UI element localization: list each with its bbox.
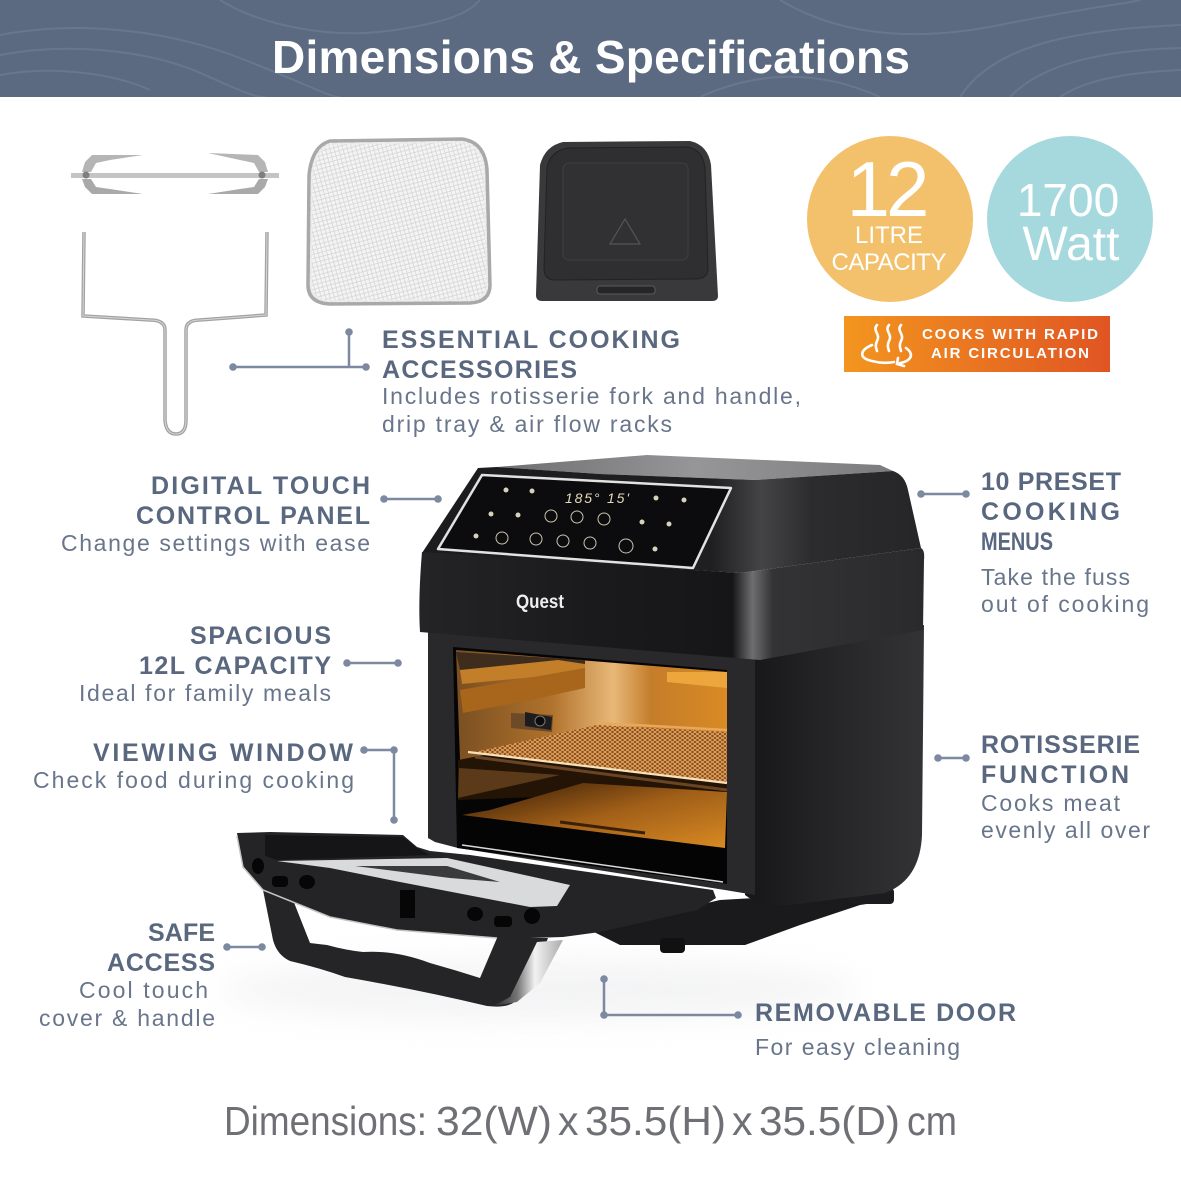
text: safe access: cover & handle bbox=[39, 1005, 215, 1031]
dimensions text: Dimensions: bbox=[224, 1098, 427, 1144]
dimensions text: 32(W) bbox=[436, 1098, 552, 1144]
badge: 1700 watt bbox=[987, 136, 1153, 302]
shadow under air fryer bbox=[220, 960, 860, 1020]
base and feet bbox=[590, 888, 894, 953]
text: digital touch control panel: DIGITAL TOUCH bbox=[151, 472, 370, 500]
text: preset cooking menus: out of cooking bbox=[981, 591, 1149, 617]
icon: drip tray bbox=[536, 141, 718, 301]
connector: viewing window bbox=[360, 746, 398, 824]
badge: 12 litre capacity: 12 bbox=[847, 145, 926, 233]
icon: rapid air bbox=[862, 325, 911, 366]
text: preset cooking menus: Take the fuss bbox=[981, 564, 1130, 590]
text: digital touch control panel: CONTROL PANEL bbox=[136, 502, 370, 530]
text: essential cooking accessories bbox=[382, 326, 801, 437]
text: preset cooking menus: 10 PRESET bbox=[981, 468, 1121, 496]
text: safe access: SAFE bbox=[148, 919, 215, 947]
text: viewing window: Check food during cooking bbox=[33, 767, 354, 793]
door handle bbox=[263, 890, 548, 1007]
connector: rotisserie bbox=[934, 754, 970, 762]
banner: rapid air circulation: AIR CIRCULATION bbox=[931, 345, 1089, 362]
text: removable door: REMOVABLE DOOR bbox=[755, 999, 1016, 1027]
door body bbox=[237, 832, 716, 938]
side body bbox=[745, 625, 924, 905]
connector: safe access bbox=[223, 943, 266, 951]
text: viewing window: VIEWING WINDOW bbox=[93, 739, 353, 767]
brand logo: Quest bbox=[516, 592, 565, 613]
control panel: 185° 15' bbox=[565, 490, 630, 506]
text: essential cooking accessories: ESSENTIAL COOKING bbox=[382, 326, 680, 354]
text: safe access: Cool touch bbox=[79, 977, 208, 1003]
text: spacious capacity: Ideal for family meals bbox=[79, 680, 331, 706]
text: spacious capacity: SPACIOUS bbox=[190, 622, 331, 650]
badge: 12 litre capacity bbox=[807, 136, 973, 302]
text: removable door bbox=[755, 999, 1016, 1060]
text: digital touch control panel bbox=[61, 472, 370, 556]
open door with handle bbox=[237, 832, 716, 1007]
title: Dimensions & Specifications bbox=[272, 31, 910, 83]
door glass bbox=[277, 858, 570, 907]
text: preset cooking menus: COOKING bbox=[981, 498, 1120, 526]
text: preset cooking menus bbox=[981, 468, 1149, 617]
door inner dark slab bbox=[265, 835, 430, 860]
dimensions text: 35.5(H) bbox=[585, 1098, 726, 1144]
handle chrome bbox=[493, 940, 563, 1006]
text: essential cooking accessories: drip tray & air flow racks bbox=[382, 411, 672, 437]
icon: air flow rack bbox=[308, 139, 490, 304]
text: essential cooking accessories: ACCESSORIES bbox=[382, 356, 577, 384]
connector: preset menus bbox=[917, 490, 970, 498]
header banner bbox=[0, 0, 1181, 97]
dimensions text: 35.5(D) bbox=[759, 1098, 900, 1144]
text: safe access: ACCESS bbox=[107, 949, 215, 977]
banner: rapid air circulation: COOKS WITH RAPID bbox=[922, 326, 1098, 343]
text: rotisserie function: ROTISSERIE bbox=[981, 731, 1140, 759]
text: spacious capacity: 12L CAPACITY bbox=[139, 652, 331, 680]
oven interior bbox=[453, 647, 727, 884]
icon: rotisserie fork bbox=[71, 153, 279, 194]
connector: digital panel bbox=[380, 495, 442, 503]
upper lid bbox=[497, 455, 893, 480]
badge: 1700 watt: 1700 bbox=[1017, 174, 1119, 226]
dimensions text: x bbox=[732, 1098, 753, 1144]
control panel bbox=[438, 475, 731, 568]
text: spacious capacity bbox=[79, 622, 331, 706]
connector: capacity bbox=[343, 659, 402, 667]
badge: 12 litre capacity: LITRE bbox=[855, 222, 923, 249]
connector: accessories bbox=[229, 328, 370, 371]
badge: 1700 watt: Watt bbox=[1023, 218, 1119, 271]
connector: removable door bbox=[600, 975, 742, 1019]
badge: 12 litre capacity: CAPACITY bbox=[832, 249, 946, 276]
text: essential cooking accessories: Includes rotisserie fork and handle, bbox=[382, 383, 801, 409]
text: rotisserie function: Cooks meat bbox=[981, 790, 1121, 816]
icon: rotisserie handle bbox=[83, 232, 267, 434]
text: digital touch control panel: Change settings with ease bbox=[61, 530, 370, 556]
dimensions text: x bbox=[558, 1098, 579, 1144]
front band bbox=[419, 548, 924, 660]
text: viewing window bbox=[33, 739, 354, 793]
dimensions text: cm bbox=[907, 1098, 957, 1144]
upper shoulder bbox=[422, 467, 921, 573]
text: removable door: For easy cleaning bbox=[755, 1034, 960, 1060]
text: rotisserie function: evenly all over bbox=[981, 817, 1150, 843]
air fryer product bbox=[419, 455, 924, 953]
front frame bbox=[428, 632, 755, 895]
text: safe access bbox=[39, 919, 215, 1031]
banner: rapid air circulation bbox=[844, 316, 1110, 372]
text: rotisserie function: FUNCTION bbox=[981, 761, 1129, 789]
text: rotisserie function bbox=[981, 731, 1150, 843]
text: preset cooking menus: MENUS bbox=[981, 528, 1053, 556]
dimensions text bbox=[224, 1098, 957, 1144]
